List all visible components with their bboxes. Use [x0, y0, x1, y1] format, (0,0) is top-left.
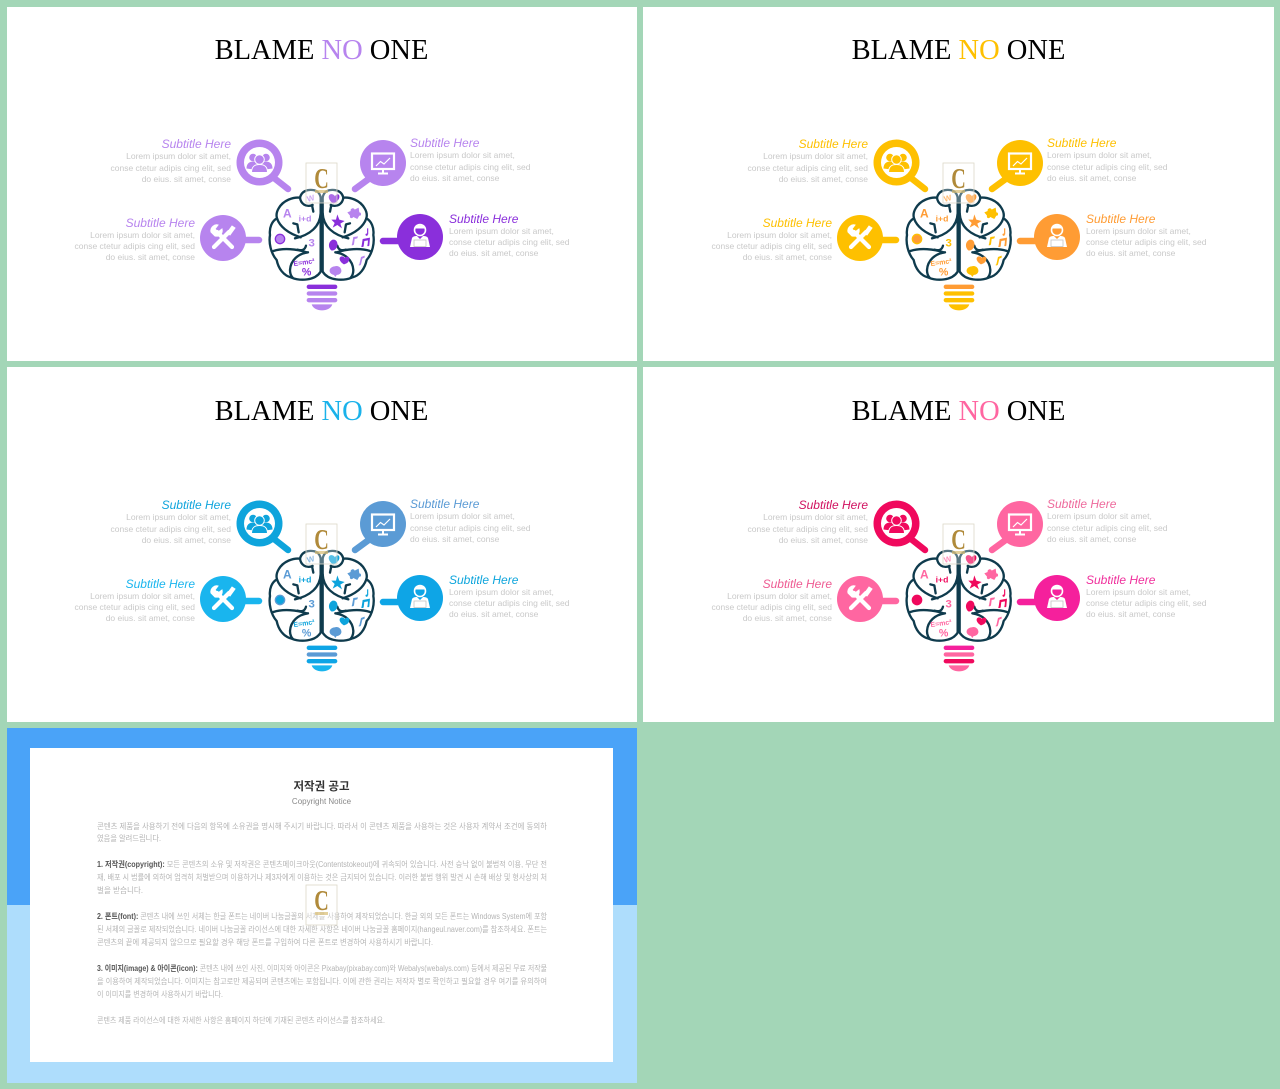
text: top right: conse ctetur adipis cing elit, sed [410, 162, 531, 172]
notice body: 벌을 받습니다. [97, 885, 143, 895]
brain bulb: i+d [936, 213, 948, 223]
notice body: 콘텐츠 제품을 사용하기 전에 다음의 항목에 소유권을 명시해 주시기 바랍니다. 따라서 이 콘텐츠 제품을 사용하는 것은 사용자 계약서 조건에 동의하 [97, 821, 548, 831]
brain bulb: % [302, 628, 312, 640]
brain bulb [907, 190, 1011, 310]
magnifier users icon [874, 500, 925, 550]
text: top right: Subtitle Here [1047, 497, 1117, 511]
text: top right [410, 136, 531, 183]
notice subheading: Copyright Notice [292, 797, 352, 806]
text: right: do eius. sit amet, conse [1086, 609, 1176, 619]
brain bulb [270, 190, 374, 310]
text: right [449, 212, 570, 258]
notice body: 을 이용하여 제작되었습니다. 이미지는 참고로만 제공되며 콘텐츠에는 포함됩니다. 이에 관한 권리는 저작자 별로 확인하고 필요할 경우 여기를 유의하여 [97, 976, 547, 986]
text: left [75, 216, 195, 262]
text: left: Subtitle Here [763, 216, 832, 230]
text: top left: conse ctetur adipis cing elit, sed [111, 163, 231, 173]
text: top right: conse ctetur adipis cing elit, sed [1047, 162, 1168, 172]
text: top left [111, 498, 231, 545]
notice body: 이 이미지를 변경하여 사용하시기 바랍니다. [97, 989, 223, 999]
text: right [449, 573, 570, 619]
notice body [97, 821, 548, 1025]
text: left: conse ctetur adipis cing elit, sed [75, 602, 195, 612]
brain bulb: A [920, 568, 929, 582]
notice heading: 저작권 공고 [293, 779, 350, 793]
text: right: conse ctetur adipis cing elit, sed [1086, 598, 1207, 608]
brain bulb: 3 [946, 237, 952, 249]
text: left: Subtitle Here [126, 216, 195, 230]
text: top left [111, 137, 231, 184]
text: left [75, 577, 195, 623]
brain bulb: i+d [299, 213, 311, 223]
brain bulb: i+d [299, 574, 311, 584]
text: top right: Subtitle Here [1047, 136, 1117, 150]
brain bulb: W [943, 554, 953, 565]
watermark logo [306, 163, 337, 203]
text: top left: conse ctetur adipis cing elit, sed [748, 163, 868, 173]
brain bulb: i+d [936, 574, 948, 584]
text: top right: Lorem ipsum dolor sit amet, [410, 150, 515, 160]
text: top left: Lorem ipsum dolor sit amet, [126, 151, 231, 161]
text: top left [748, 498, 868, 545]
text: left: do eius. sit amet, conse [106, 252, 195, 262]
text: left [712, 216, 832, 262]
text: top right: do eius. sit amet, conse [410, 534, 500, 544]
watermark logo [306, 524, 337, 564]
text: top left: Lorem ipsum dolor sit amet, [763, 512, 868, 522]
text: top right: Lorem ipsum dolor sit amet, [410, 511, 515, 521]
brain bulb: A [283, 568, 292, 582]
text: top left: conse ctetur adipis cing elit, sed [111, 524, 231, 534]
notice body: 였음을 알려드립니다. [97, 833, 161, 843]
text: left: do eius. sit amet, conse [743, 252, 832, 262]
brain bulb: 3 [946, 598, 952, 610]
text: top right: do eius. sit amet, conse [1047, 534, 1137, 544]
tools icon [837, 215, 896, 261]
notice body: 재, 배포 시 법률에 의하여 엄격히 처벌받으며 이용하거나 제3자에게 이용하는 것은 금지되어 있습니다. 이러한 불법 행위 발견 시 손해 배상 및 형사상의 처 [97, 872, 547, 882]
monitor icon [992, 140, 1043, 189]
text: right: Lorem ipsum dolor sit amet, [449, 226, 554, 236]
text: left: Lorem ipsum dolor sit amet, [727, 591, 832, 601]
text: left: Lorem ipsum dolor sit amet, [90, 591, 195, 601]
notice body: 콘텐츠 제품 라이선스에 대한 자세한 사항은 홈페이지 하단에 기재된 콘텐츠 라이선스를 참조하세요. [97, 1015, 385, 1025]
text: left: Subtitle Here [126, 577, 195, 591]
text: top left: Lorem ipsum dolor sit amet, [763, 151, 868, 161]
brain bulb [907, 551, 1011, 671]
slide: pink [643, 367, 1274, 722]
text: top left: Subtitle Here [162, 137, 231, 151]
text: right [1086, 573, 1207, 619]
monitor icon [355, 501, 406, 550]
brain bulb: E=mc² [930, 619, 953, 629]
notice body: 2. 폰트(font): 콘텐츠 내에 쓰인 서체는 한글 폰트는 네이버 나눔글꼴의 서체를 사용하여 제작되었습니다. 한글 외의 모든 폰트는 Windows System에 포함 [97, 911, 548, 921]
tools icon [200, 576, 259, 622]
text: left: conse ctetur adipis cing elit, sed [712, 241, 832, 251]
brain bulb [270, 551, 374, 671]
brain bulb: 3 [309, 237, 315, 249]
text: left: Lorem ipsum dolor sit amet, [727, 230, 832, 240]
text: left: conse ctetur adipis cing elit, sed [712, 602, 832, 612]
text: top left: Subtitle Here [799, 137, 868, 151]
slide: blue [7, 367, 637, 722]
text: top right [1047, 136, 1168, 183]
brain bulb: W [943, 193, 953, 204]
magnifier users icon [236, 500, 288, 550]
watermark logo [306, 885, 337, 925]
text: top right: Subtitle Here [410, 136, 480, 150]
monitor icon [992, 501, 1043, 550]
notice body: 콘텐츠의 끝에 제공되지 않으므로 필요할 경우 해당 폰트를 구입하여 다른 폰트로 변경하여 사용하시기 바랍니다. [97, 937, 433, 947]
text: right: Lorem ipsum dolor sit amet, [449, 587, 554, 597]
text: left [712, 577, 832, 623]
text: top right: Lorem ipsum dolor sit amet, [1047, 511, 1152, 521]
text: right: Lorem ipsum dolor sit amet, [1086, 226, 1191, 236]
notice body: 된 서체의 글꼴로 제작되었습니다. 네이버 나눔글꼴 라이선스에 대한 자세한 사항은 네이버 나눔글꼴 홈페이지(hangeul.naver.com)를 참조하세요. 폰트는 [97, 924, 547, 934]
brain bulb: A [920, 207, 929, 221]
text: top right: do eius. sit amet, conse [1047, 173, 1137, 183]
text: left: Subtitle Here [763, 577, 832, 591]
text: right [1086, 212, 1207, 258]
text: top right: Subtitle Here [410, 497, 480, 511]
title: BLAME NO ONE [852, 35, 1065, 66]
brain bulb: A [283, 207, 292, 221]
text: top right: conse ctetur adipis cing elit, sed [1047, 523, 1168, 533]
text: top left: Subtitle Here [162, 498, 231, 512]
brain bulb: % [939, 267, 949, 279]
text: left: do eius. sit amet, conse [106, 613, 195, 623]
text: right: conse ctetur adipis cing elit, sed [1086, 237, 1207, 247]
text: right: do eius. sit amet, conse [1086, 248, 1176, 258]
tools icon [837, 576, 896, 622]
title: BLAME NO ONE [215, 35, 428, 66]
text: right: conse ctetur adipis cing elit, sed [449, 237, 570, 247]
brain bulb: E=mc² [293, 258, 316, 268]
watermark logo: C [951, 164, 966, 195]
text: left: do eius. sit amet, conse [743, 613, 832, 623]
text: top left: Subtitle Here [799, 498, 868, 512]
text: right: Subtitle Here [449, 573, 519, 587]
text: top right: conse ctetur adipis cing elit, sed [410, 523, 531, 533]
watermark logo: C [314, 525, 329, 556]
text: top left: do eius. sit amet, conse [142, 174, 231, 184]
person icon [383, 214, 443, 260]
person icon [383, 575, 443, 621]
title: BLAME NO ONE [852, 396, 1065, 427]
brain bulb: E=mc² [930, 258, 953, 268]
text: right: do eius. sit amet, conse [449, 609, 539, 619]
magnifier users icon [874, 140, 925, 189]
text: right: Subtitle Here [449, 212, 519, 226]
watermark logo [943, 163, 974, 203]
text: top left: do eius. sit amet, conse [779, 535, 868, 545]
notice body: 1. 저작권(copyright): 모든 콘텐츠의 소유 및 저작권은 콘텐츠메이크아웃(Contentstokeout)에 귀속되어 있습니다. 사전 승낙 없이 불법적 이용, 무단 전 [97, 859, 547, 869]
text: right: conse ctetur adipis cing elit, sed [449, 598, 570, 608]
brain bulb: W [306, 193, 316, 204]
title: BLAME NO ONE [215, 396, 428, 427]
tools icon [200, 215, 259, 261]
text: right: do eius. sit amet, conse [449, 248, 539, 258]
notice body: 3. 이미지(image) & 아이콘(icon): 콘텐츠 내에 쓰인 사진, 이미지와 아이콘은 Pixabay(pixabay.com)와 Webalys(webalys.com) 등에서 제공된 무료 저작물 [97, 963, 547, 973]
text: top left [748, 137, 868, 184]
brain bulb: % [939, 628, 949, 640]
watermark logo [943, 524, 974, 564]
text: top right [410, 497, 531, 544]
brain bulb: W [306, 554, 316, 565]
text: top left: conse ctetur adipis cing elit, sed [748, 524, 868, 534]
text: top right [1047, 497, 1168, 544]
text: right: Subtitle Here [1086, 212, 1156, 226]
monitor icon [355, 140, 406, 189]
text: right: Subtitle Here [1086, 573, 1156, 587]
text: top right: do eius. sit amet, conse [410, 173, 500, 183]
watermark logo: C [951, 525, 966, 556]
text: top right: Lorem ipsum dolor sit amet, [1047, 150, 1152, 160]
text: left: conse ctetur adipis cing elit, sed [75, 241, 195, 251]
text: left: Lorem ipsum dolor sit amet, [90, 230, 195, 240]
text: top left: do eius. sit amet, conse [142, 535, 231, 545]
person icon [1020, 575, 1080, 621]
slide: purple [7, 7, 637, 361]
watermark logo: C [314, 886, 329, 917]
brain bulb: 3 [309, 598, 315, 610]
magnifier users icon [236, 140, 288, 189]
slide: yellow [643, 7, 1274, 361]
person icon [1020, 214, 1080, 260]
text: top left: do eius. sit amet, conse [779, 174, 868, 184]
watermark logo: C [314, 164, 329, 195]
brain bulb: E=mc² [293, 619, 316, 629]
slide: copyright notice [7, 728, 637, 1083]
brain bulb: % [302, 267, 312, 279]
text: right: Lorem ipsum dolor sit amet, [1086, 587, 1191, 597]
text: top left: Lorem ipsum dolor sit amet, [126, 512, 231, 522]
